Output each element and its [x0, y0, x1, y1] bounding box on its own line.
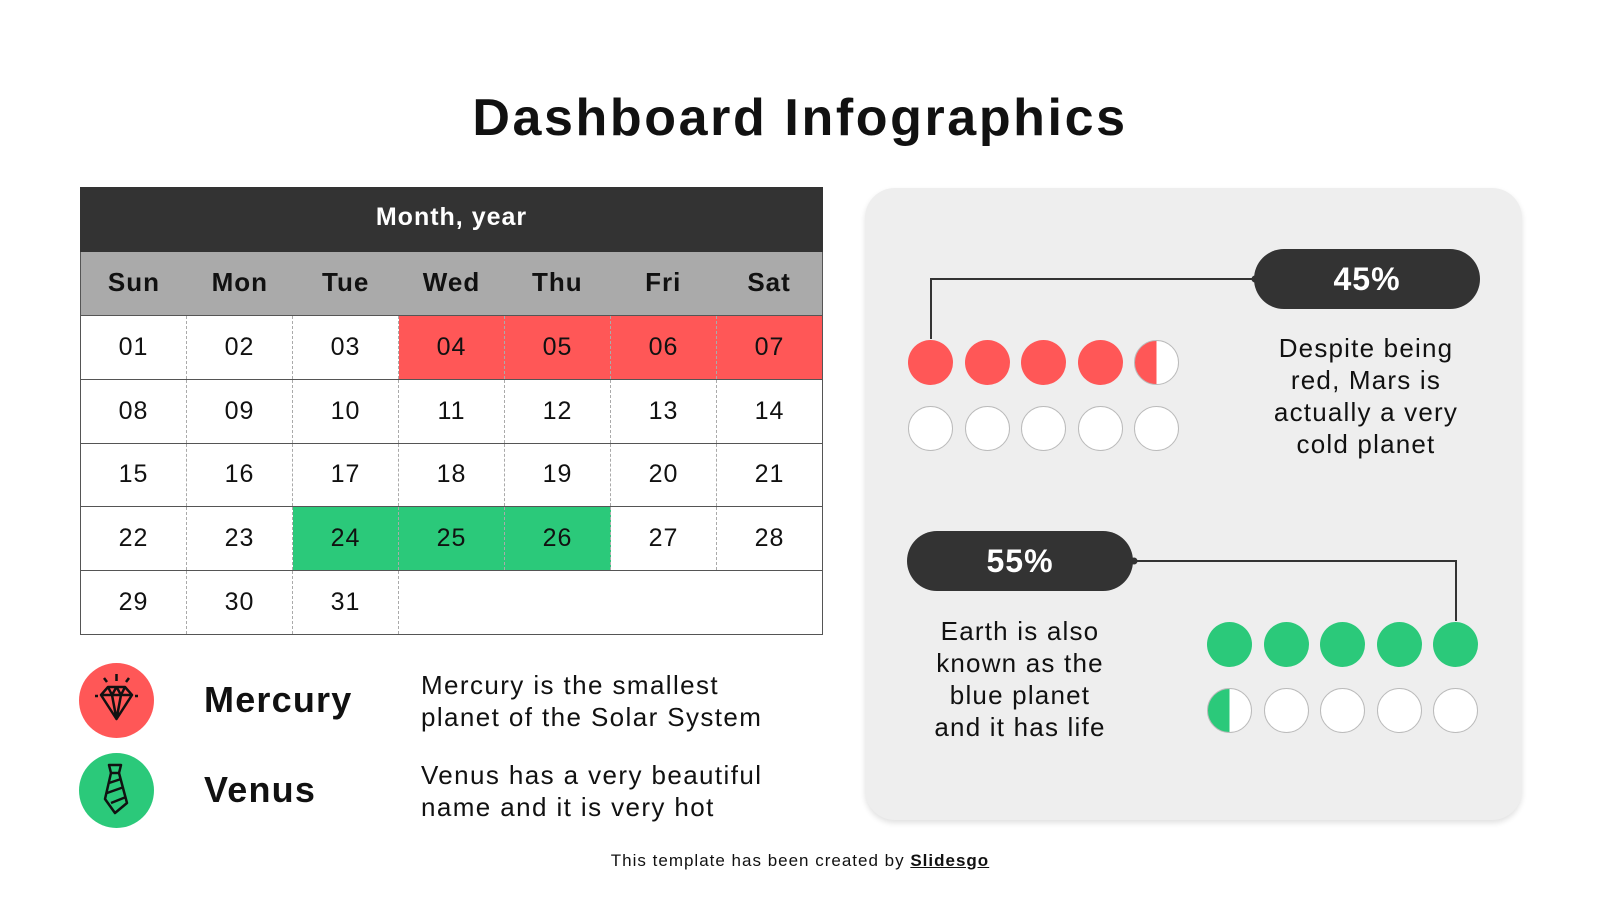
text: Mars: [1274, 333, 1458, 459]
connector: 45%: [930, 276, 1254, 339]
weekday row: [80, 252, 823, 315]
weekday row: Fri: [645, 267, 681, 297]
day grid: 19: [543, 460, 572, 488]
text: Earth: and it has life: [934, 712, 1106, 742]
legend: Mercury: [79, 663, 762, 738]
text: Earth: known as the: [936, 648, 1104, 678]
day grid: 15: [119, 460, 148, 488]
day grid: 29: [119, 588, 148, 616]
day grid: 25: [437, 524, 466, 552]
weekday row: Wed: [423, 267, 480, 297]
day grid: 14: [755, 397, 784, 425]
day grid: 01: [119, 333, 148, 361]
panel: stats: [865, 188, 1522, 820]
text: Earth: [934, 616, 1106, 742]
description Venus: Venus has a very beautiful: [421, 760, 762, 790]
weekday row: Sat: [747, 267, 791, 297]
day grid: 05: [543, 333, 572, 361]
day grid: 03: [331, 333, 360, 361]
day grid: 27: [649, 524, 678, 552]
weekday row: Mon: [212, 267, 268, 297]
day grid: [80, 315, 823, 635]
day grid: 18: [437, 460, 466, 488]
day grid: 17: [331, 460, 360, 488]
label Venus: Venus: [204, 769, 316, 810]
description Mercury: [421, 670, 762, 732]
calendar header: [80, 187, 823, 252]
icon: tie: [79, 753, 154, 828]
day grid: 02: [225, 333, 254, 361]
title: Dashboard Infographics: [472, 89, 1128, 147]
day grid: 21: [755, 460, 784, 488]
description Venus: name and it is very hot: [421, 792, 715, 822]
weekday row: Thu: [532, 267, 583, 297]
icon: diamond: [79, 663, 154, 738]
day grid: 04: [437, 333, 466, 361]
day grid: 30: [225, 588, 254, 616]
text: Mars: red, Mars is: [1291, 365, 1441, 395]
text: Earth: Earth is also: [941, 616, 1099, 646]
pill 55%: 55%: [986, 543, 1054, 579]
day grid: 12: [543, 397, 572, 425]
day grid: 31: [331, 588, 360, 616]
text: Mars: cold planet: [1297, 429, 1435, 459]
day grid: 24: [331, 524, 360, 552]
description Venus: [421, 760, 762, 822]
dots: Earth 55%: [1207, 622, 1478, 733]
day grid: 09: [225, 397, 254, 425]
calendar: [80, 187, 823, 635]
connector: 55%: [1132, 558, 1457, 621]
day grid: 28: [755, 524, 784, 552]
pill 45%: [1254, 249, 1480, 309]
footer: This template has been created by Slidesgo: [611, 851, 989, 870]
description Mercury: planet of the Solar System: [421, 702, 762, 732]
calendar header: Month, year: [376, 203, 527, 231]
description Mercury: Mercury is the smallest: [421, 670, 719, 700]
day grid: 06: [649, 333, 678, 361]
day grid: 13: [649, 397, 678, 425]
day grid: 23: [225, 524, 254, 552]
day grid: 08: [119, 397, 148, 425]
legend: Venus: [79, 753, 762, 828]
text: Mars: actually a very: [1274, 397, 1458, 427]
weekday row: Sun: [108, 267, 160, 297]
text: Earth: blue planet: [950, 680, 1090, 710]
text: Mars: Despite being: [1279, 333, 1453, 363]
day grid: 10: [331, 397, 360, 425]
day grid: 22: [119, 524, 148, 552]
day grid: 20: [649, 460, 678, 488]
day grid: 26: [543, 524, 572, 552]
label Mercury: Mercury: [204, 679, 352, 720]
weekday row: Tue: [322, 267, 369, 297]
day grid: 16: [225, 460, 254, 488]
day grid: 11: [438, 397, 465, 425]
dots: Mars 45%: [908, 340, 1179, 451]
day grid: 07: [755, 333, 784, 361]
pill 45%: 45%: [1333, 261, 1401, 297]
pill 55%: [907, 531, 1133, 591]
